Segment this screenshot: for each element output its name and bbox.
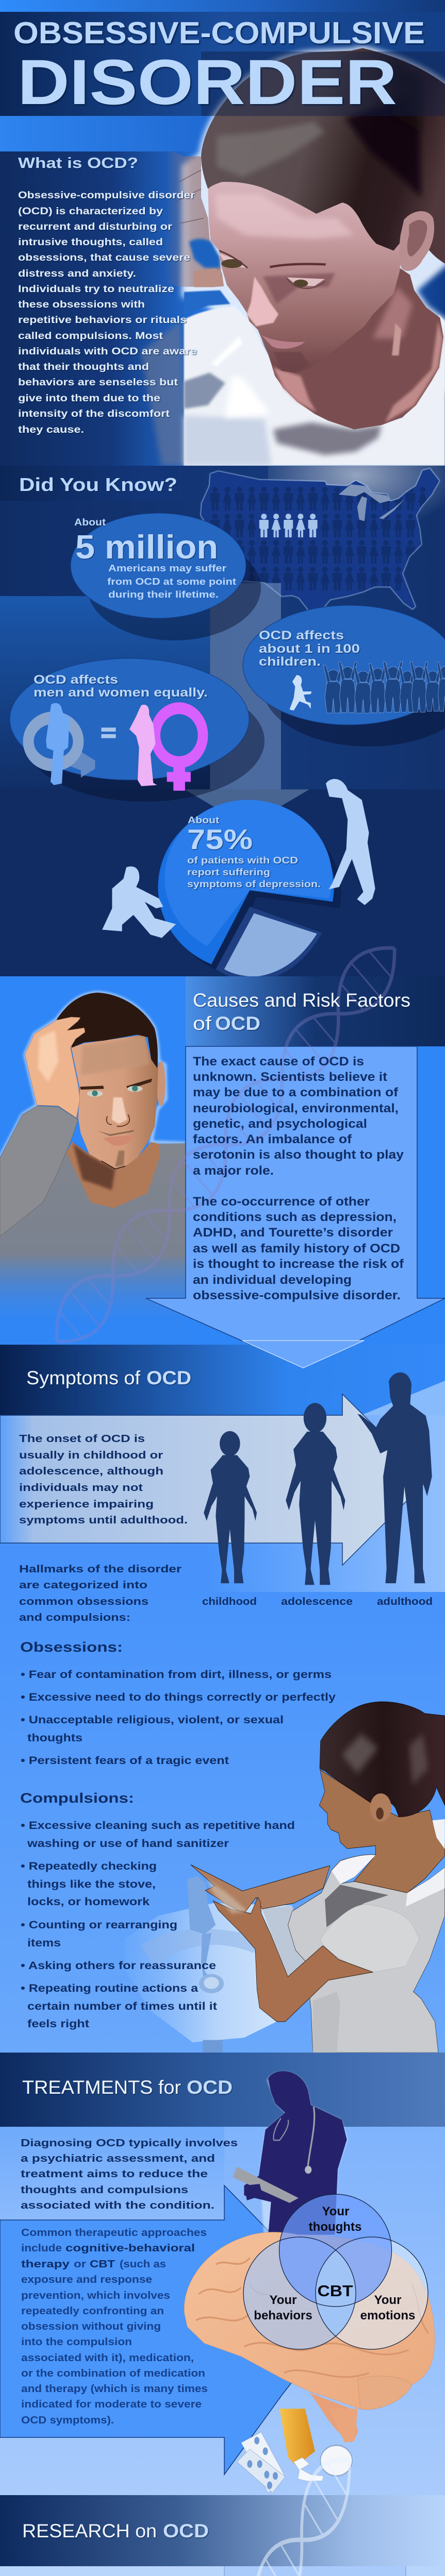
text block: therapeutic approaches: obsession without giving — [21, 2321, 161, 2332]
list: compulsions: • Counting or rearranging — [21, 1919, 177, 1931]
text block: causes: ADHD, and Tourette’s disorder — [193, 1226, 393, 1240]
list: compulsions: locks, or homework — [27, 1896, 150, 1908]
heading: causes and risk factors — [193, 990, 410, 1034]
callout: men and women equally — [10, 658, 265, 802]
text block: diagnosing: a psychiatric assessment, and — [21, 2153, 215, 2164]
callout: 5 million: About — [74, 517, 106, 528]
decorative DNA strand: causes — [57, 948, 394, 1342]
illustration: medication pills and bottle — [237, 2409, 358, 2493]
text block: causes — [193, 1055, 404, 1302]
arrow: onset over the lifespan — [0, 1394, 428, 1565]
heading: did you know: Did You Know? — [19, 474, 177, 495]
heading: causes and risk factors: Causes and Risk Factors — [193, 990, 410, 1011]
callout: men and women equally: men and women equally. — [34, 686, 208, 700]
panel: causes and risk factors background — [0, 976, 445, 1345]
chart: CBT venn diagram: emotions — [360, 2309, 415, 2323]
callout: 1 in 100 children: children. — [259, 655, 321, 669]
text block: 75 percent: 75% — [187, 823, 253, 855]
text block: hallmarks: Hallmarks of the disorder — [19, 1564, 182, 1575]
text block: therapeutic approaches: prevention, which involves — [21, 2290, 170, 2301]
illustration: worried woman — [141, 48, 445, 466]
callout: men and women equally: OCD affects — [34, 673, 118, 687]
text block: therapeutic approaches: associated with it), medication, — [21, 2352, 194, 2364]
heading: what is OCD: What is OCD? — [18, 155, 138, 172]
list: compulsions: items — [27, 1937, 61, 1949]
text block: hallmarks: and compulsions: — [19, 1612, 130, 1623]
list: compulsions: washing or use of hand sanitizer — [27, 1838, 229, 1850]
text block: therapeutic approaches: (such as — [120, 2259, 166, 2270]
text block: therapeutic approaches: therapy — [21, 2259, 70, 2270]
text block: what is OCD: recurrent and disturbing or — [18, 222, 173, 232]
heading: research: OCD — [163, 2520, 209, 2541]
text block: causes: factors. An imbalance of — [193, 1132, 352, 1146]
illustration: woman washing hands — [125, 1702, 445, 2054]
chart: CBT venn diagram: CBT — [318, 2282, 353, 2300]
text block: what is OCD: (OCD) is characterized by — [18, 206, 163, 217]
heading: research: RESEARCH on — [22, 2520, 157, 2541]
text block: causes: genetic, and psychological — [193, 1117, 367, 1131]
heading: causes and risk factors: of — [193, 1013, 212, 1034]
text block: what is OCD: behaviors are senseless but — [18, 377, 178, 388]
text block: what is OCD: intrusive thoughts, called — [18, 237, 163, 248]
icon: woman and female symbol — [129, 705, 203, 791]
text block: onset — [19, 1433, 188, 1526]
icon: child silhouette — [204, 1431, 257, 1583]
text block: onset: experience impairing — [19, 1499, 154, 1510]
heading band: symptoms: OCD — [146, 1367, 191, 1388]
panel: symptoms background — [0, 1368, 445, 2053]
text block: what is OCD: give into them due to the — [18, 393, 160, 404]
text block: causes: The co-occurrence of other — [193, 1195, 370, 1209]
heading band: symptoms — [0, 1341, 445, 1415]
text block: 75 percent: report suffering — [187, 867, 270, 877]
text block: therapeutic approaches: cognitive-behavioral — [65, 2243, 195, 2254]
icon: adult silhouette — [358, 1372, 432, 1583]
text block: diagnosing: Diagnosing OCD typically involves — [21, 2138, 238, 2149]
list: compulsions: • Asking others for reassurance — [21, 1960, 216, 1972]
chart: 75 percent pie — [158, 800, 341, 981]
title: DISORDER — [18, 47, 397, 118]
text block: what is OCD — [18, 190, 197, 435]
text block: causes: serotonin is also thought to play — [193, 1148, 404, 1162]
chart: CBT venn diagram: Your — [270, 2293, 296, 2307]
callout: 5 million: during their lifetime. — [108, 589, 219, 600]
panel: title banner — [0, 0, 445, 151]
text block: onset: usually in childhood or — [19, 1450, 163, 1461]
text block: hallmarks — [19, 1564, 182, 1623]
text block: causes: an individual developing — [193, 1273, 352, 1287]
heading: causes and risk factors: OCD — [215, 1013, 260, 1034]
list: obsessions — [21, 1669, 336, 1767]
text block: what is OCD: Obsessive-compulsive disorder — [18, 190, 195, 201]
callout: 5 million: from OCD at some point — [107, 577, 236, 587]
callout: 5 million: 5 million — [75, 528, 218, 566]
labels: life stages: adulthood — [377, 1596, 433, 1607]
text block: causes: neurobiological, environmental, — [193, 1101, 399, 1115]
icon: adolescent silhouette — [286, 1403, 345, 1585]
text block: therapeutic approaches: repeatedly confronting an — [21, 2306, 164, 2317]
text block: 75 percent — [187, 815, 321, 889]
list: compulsions: certain number of times until it — [27, 2001, 217, 2012]
panel: did you know background — [0, 466, 445, 976]
callout: 1 in 100 children — [243, 605, 445, 747]
text block: diagnosing: associated with the condition. — [21, 2200, 215, 2211]
list: compulsions: • Excessive cleaning such as repetitive hand — [21, 1820, 295, 1832]
labels: life stages: childhood — [202, 1596, 257, 1607]
chart: CBT venn diagram: Your — [322, 2205, 349, 2218]
labels: life stages — [202, 1596, 433, 1607]
text block: what is OCD: these obsessions with — [18, 299, 145, 310]
panel: research background — [0, 2495, 445, 2576]
list: obsessions: • Excessive need to do things correctly or perfectly — [21, 1691, 336, 1703]
text block: causes: is thought to increase the risk of — [193, 1257, 404, 1271]
heading: treatments: TREATMENTS for — [22, 2077, 181, 2098]
text block: what is OCD: individuals with OCD are aware — [18, 346, 197, 357]
text block: therapeutic approaches: indicated for moderate to severe — [21, 2399, 202, 2410]
text block: what is OCD: obsessions, that cause severe — [18, 252, 190, 263]
text block: onset: individuals may not — [19, 1482, 143, 1494]
text block: therapeutic approaches — [21, 2227, 208, 2426]
text block: therapeutic approaches: exposure and response — [21, 2274, 152, 2285]
list: obsessions: • Fear of contamination from dirt, illness, or germs — [21, 1669, 332, 1681]
labels: life stages: adolescence — [281, 1596, 353, 1607]
arrow: down arrow behind stats — [185, 583, 309, 826]
text block: 75 percent: symptoms of depression. — [187, 879, 321, 889]
group of children silhouettes — [323, 662, 445, 713]
text block: 75 percent: About — [188, 815, 219, 825]
chart: CBT venn diagram: thoughts — [309, 2220, 361, 2234]
list: compulsions: feels right — [27, 2018, 89, 2030]
text block: what is OCD: Individuals try to neutralize — [18, 284, 174, 295]
chart: CBT venn diagram: Your — [374, 2293, 401, 2307]
text block: 75 percent: of patients with OCD — [187, 855, 298, 866]
callout: 1 in 100 children: OCD affects — [259, 629, 344, 642]
map: United States with population figures — [201, 469, 439, 617]
text block: causes: unknown. Scientists believe it — [193, 1070, 387, 1084]
text block: diagnosing — [21, 2138, 238, 2211]
icon: equals sign — [101, 727, 116, 738]
chart: CBT venn diagram — [243, 2194, 428, 2349]
text block: therapeutic approaches: include — [21, 2243, 62, 2254]
text block: onset: adolescence, although — [19, 1466, 163, 1477]
list: compulsions: things like the stove, — [27, 1878, 156, 1890]
list: obsessions: • Persistent fears of a tragic event — [21, 1755, 229, 1767]
title — [13, 16, 425, 118]
icon: doctor silhouette — [233, 2071, 348, 2238]
icon: running girl — [289, 675, 311, 710]
text block: diagnosing: thoughts and compulsions — [21, 2184, 188, 2196]
text block: therapeutic approaches: or — [74, 2259, 86, 2270]
callout: 5 million — [71, 513, 261, 640]
text block: therapeutic approaches: CBT — [90, 2259, 115, 2270]
heading: compulsions: Compulsions: — [20, 1790, 134, 1806]
text block: what is OCD: distress and anxiety. — [18, 268, 136, 279]
panel: treatments background — [0, 2053, 445, 2495]
illustration: man holding his head — [0, 993, 186, 1345]
icon: sitting woman silhouette — [102, 867, 176, 938]
text block: hallmarks: common obsessions — [19, 1596, 149, 1607]
text block: causes: The exact cause of OCD is — [193, 1055, 364, 1069]
text block: onset: symptoms until adulthood. — [19, 1515, 188, 1526]
text block: causes: a major role. — [193, 1164, 274, 1178]
text block: therapeutic approaches: or the combination of medication — [21, 2368, 205, 2379]
text block: what is OCD: that their thoughts and — [18, 362, 149, 372]
list: obsessions: thoughts — [27, 1732, 83, 1744]
text block: therapeutic approaches: Common therapeutic approaches — [21, 2227, 207, 2239]
icon: male symbol and man — [28, 703, 95, 785]
text block: causes: may be due to a combination of — [193, 1086, 399, 1099]
text block: onset: The onset of OCD is — [19, 1433, 145, 1445]
text block: causes: conditions such as depression, — [193, 1210, 397, 1224]
title: OBSESSIVE-COMPULSIVE — [13, 16, 425, 50]
text block: what is OCD: repetitive behaviors or rituals — [18, 315, 187, 326]
heading: treatments: OCD — [187, 2077, 233, 2098]
chart: CBT venn diagram: behaviors — [254, 2309, 312, 2323]
list: obsessions: • Unacceptable religious, violent, or sexual — [21, 1714, 284, 1726]
text block: what is OCD: called compulsions. Most — [18, 331, 163, 342]
panel: what is OCD background — [0, 151, 445, 466]
arrow: treatments pointing to therapy — [0, 2185, 330, 2475]
text block: what is OCD: they cause. — [18, 425, 84, 435]
list: compulsions: • Repeatedly checking — [21, 1860, 157, 1872]
list: compulsions — [21, 1820, 295, 2030]
decorative DNA strand: research — [62, 2460, 350, 2576]
text block: hallmarks: are categorized into — [19, 1580, 147, 1591]
text block: diagnosing: treatment aims to reduce the — [21, 2168, 208, 2180]
icon: walking man silhouette — [326, 779, 375, 905]
text block: causes: obsessive-compulsive disorder. — [193, 1289, 401, 1302]
heading: obsessions: Obsessions: — [20, 1639, 123, 1655]
text block: therapeutic approaches: OCD symptoms). — [21, 2415, 114, 2426]
callout: 1 in 100 children: about 1 in 100 — [259, 642, 360, 656]
list: compulsions: • Repeating routine actions a — [21, 1982, 198, 1994]
illustration: brain — [184, 2232, 435, 2443]
callout: 5 million: Americans may suffer — [108, 563, 226, 573]
heading band: symptoms: Symptoms of — [26, 1367, 141, 1388]
text block: therapeutic approaches: into the compulsion — [21, 2336, 132, 2348]
arrow: causes down arrow with text column — [146, 976, 445, 1368]
text block: causes: as well as family history of OCD — [193, 1242, 400, 1256]
text block: therapeutic approaches: and therapy (which is many times — [21, 2383, 208, 2395]
text block: what is OCD: intensity of the discomfort — [18, 409, 170, 419]
